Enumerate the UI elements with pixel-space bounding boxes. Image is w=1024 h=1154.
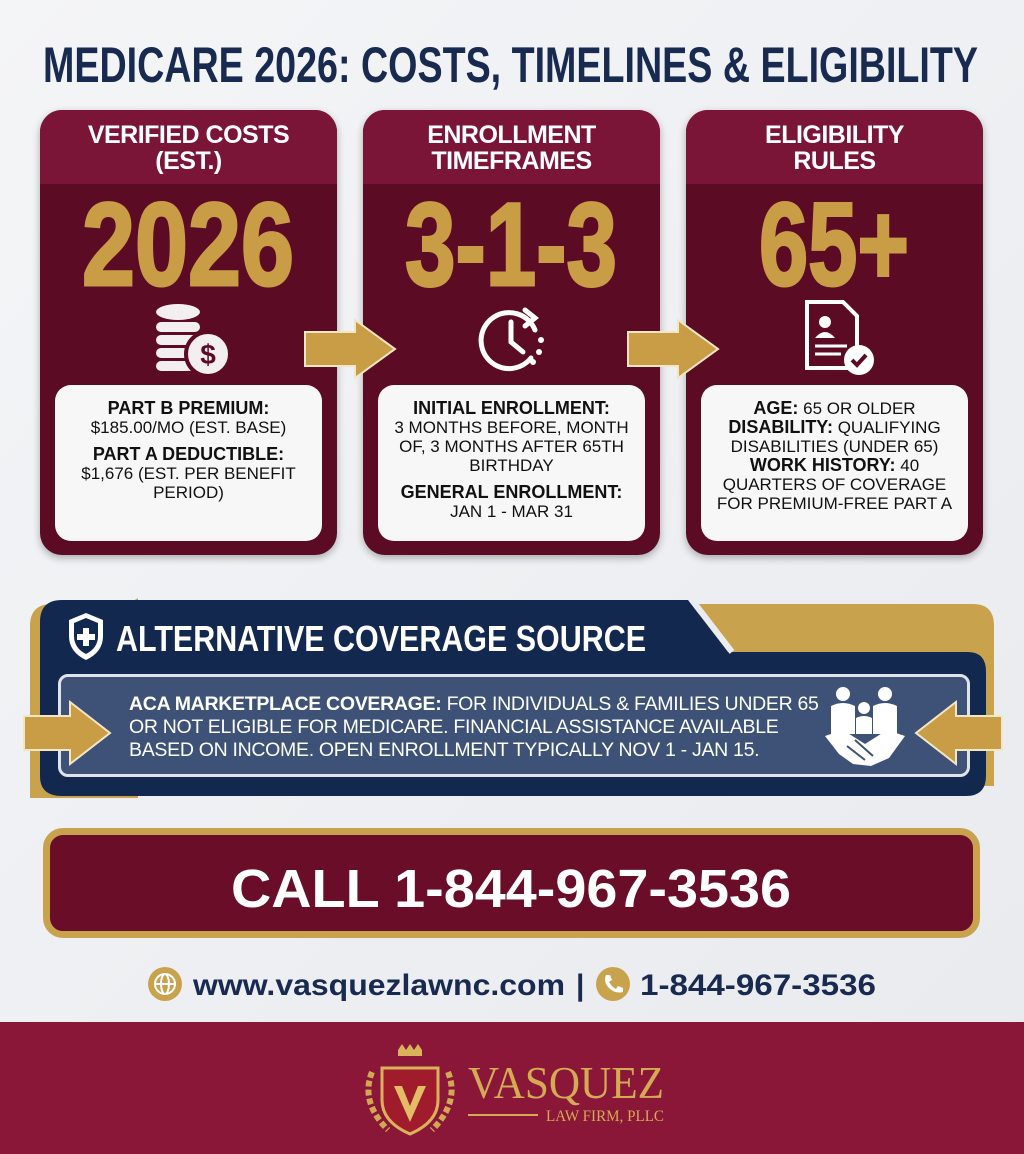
icon: shield xyxy=(69,613,103,660)
text box: enrollment xyxy=(378,385,645,541)
text box: ACA marketplace: ACA MARKETPLACE COVERAGE: FOR INDIVIDUALS & FAMILIES UNDER 65 xyxy=(129,693,819,715)
contact line: | xyxy=(576,969,584,1002)
text box: enrollment: INITIAL ENROLLMENT: xyxy=(413,398,610,418)
logo: Vasquez Law Firm: LAW FIRM, PLLC xyxy=(546,1108,664,1125)
text box: enrollment: 3 MONTHS BEFORE, MONTH xyxy=(394,418,629,437)
text box: eligibility: QUARTERS OF COVERAGE xyxy=(723,475,946,494)
text box: enrollment: JAN 1 - MAR 31 xyxy=(450,502,573,521)
contact line: 1-844-967-3536 xyxy=(640,969,876,1002)
text box: ACA marketplace xyxy=(58,674,970,777)
arrow: left gold xyxy=(23,700,112,766)
icon: document check xyxy=(805,300,874,375)
panel: verified costs: VERIFIED COSTS xyxy=(88,121,289,149)
text box: costs: $1,676 (EST. PER BENEFIT xyxy=(81,464,296,483)
footer band xyxy=(0,1022,1024,1154)
icon: phone xyxy=(596,967,630,1001)
text box: eligibility: AGE: 65 OR OLDER xyxy=(753,398,916,418)
text box: enrollment: BIRTHDAY GENERAL ENROLLMENT: xyxy=(401,456,622,502)
arrow: right gold xyxy=(914,700,1003,766)
text box: eligibility: DISABILITY: QUALIFYING xyxy=(728,417,941,437)
contact line xyxy=(148,967,876,1002)
text box: costs xyxy=(55,385,322,541)
icon: globe xyxy=(148,967,182,1001)
call box: CALL 1-844-967-3536 xyxy=(231,859,791,919)
panel: enrollment timeframes: ENROLLMENT xyxy=(427,121,596,149)
panel: enrollment timeframes: TIMEFRAMES xyxy=(431,147,592,175)
text box: ACA marketplace: BASED ON INCOME. OPEN ENROLLMENT TYPICALLY NOV 1 - JAN 15. xyxy=(129,739,759,761)
contact line: www.vasquezlawnc.com xyxy=(193,969,565,1002)
text box: costs: PERIOD) xyxy=(153,483,224,502)
panel: alternative coverage xyxy=(30,598,994,798)
text box: eligibility: WORK HISTORY: 40 xyxy=(750,455,919,475)
arrow: enrollment to eligibility xyxy=(627,318,720,380)
panel: eligibility rules: ELIGIBILITY xyxy=(765,121,904,149)
text box: costs: $185.00/MO (EST. BASE) PART A DEDUCTIBLE: xyxy=(91,418,286,464)
icon: coins: $ xyxy=(200,339,216,370)
panel: verified costs xyxy=(40,110,337,555)
text box: eligibility: DISABILITIES (UNDER 65) xyxy=(731,437,938,456)
logo: Vasquez Law Firm xyxy=(365,1044,664,1136)
panel: eligibility rules xyxy=(686,110,983,555)
text box: eligibility xyxy=(701,385,968,541)
panel: eligibility rules: RULES xyxy=(793,147,876,175)
text box: eligibility: FOR PREMIUM-FREE PART A xyxy=(717,494,952,513)
panel: verified costs: (EST.) xyxy=(155,147,222,175)
icon: coins xyxy=(156,304,228,374)
text box: ACA marketplace: OR NOT ELIGIBLE FOR MEDICARE. FINANCIAL ASSISTANCE AVAILABLE xyxy=(129,716,779,738)
panel: enrollment timeframes xyxy=(363,110,660,555)
icon: clock xyxy=(478,308,544,372)
text box: enrollment: OF, 3 MONTHS AFTER 65TH xyxy=(399,437,624,456)
text box: costs: PART B PREMIUM: xyxy=(108,398,269,418)
call box xyxy=(43,828,980,938)
icon: family handshake xyxy=(825,687,905,766)
arrow: costs to enrollment xyxy=(304,318,397,380)
